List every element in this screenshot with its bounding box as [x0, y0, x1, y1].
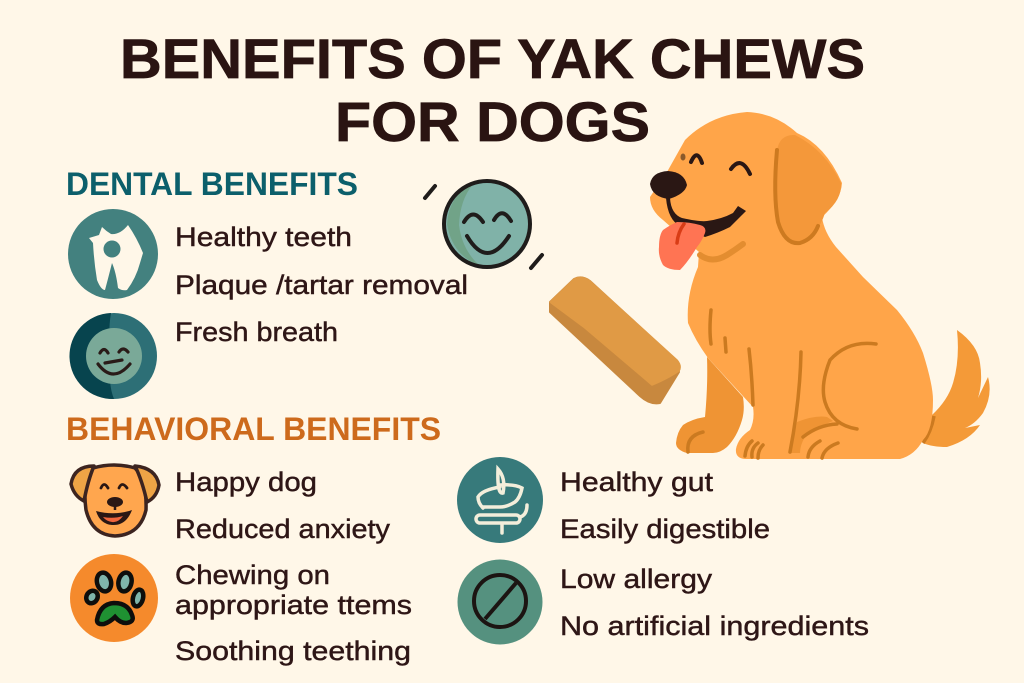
title: BENEFITS OF YAK CHEWS [120, 27, 865, 90]
dog collar fur [700, 244, 743, 260]
text: soothing teething: Soothing teething [175, 636, 411, 666]
icon: happy dog face [71, 465, 159, 536]
dog ear [776, 135, 841, 243]
text: chewing on appropriate items: Chewing on [175, 560, 330, 590]
dog back leg [676, 357, 744, 453]
dog nose [650, 171, 687, 199]
text: happy dog: Happy dog [175, 467, 317, 497]
icon: fresh breath smile [69, 313, 157, 399]
text: easily digestible: Easily digestible [560, 514, 770, 544]
dog body lines [688, 310, 876, 458]
text: plaque/tartar removal: Plaque /tartar removal [175, 270, 468, 300]
text: chewing on appropriate items [175, 560, 412, 620]
dog eyes [691, 155, 750, 174]
dog tail [923, 330, 990, 447]
text: no artificial ingredients: No artificial ingredients [560, 611, 869, 641]
heading: behavioral benefits: BEHAVIORAL BENEFITS [66, 411, 441, 447]
text: chewing on appropriate items: appropriate ttems [175, 590, 412, 620]
title [120, 27, 865, 153]
icon: tooth [68, 209, 158, 299]
dog leg shadow [790, 417, 833, 453]
icon: floating smiley with motion marks [425, 181, 542, 268]
title: FOR DOGS [335, 90, 650, 153]
dog illustration [650, 112, 990, 459]
text: low allergy: Low allergy [560, 564, 713, 594]
text: fresh breath: Fresh breath [175, 317, 338, 347]
icon: healthy gut [457, 457, 543, 543]
text: reduced anxiety: Reduced anxiety [175, 514, 391, 544]
dog mouth [666, 198, 746, 237]
dog body and head [650, 112, 933, 459]
heading: dental benefits: DENTAL BENEFITS [66, 166, 358, 202]
icon: no artificial ingredients [458, 560, 542, 644]
yak chew [550, 277, 680, 403]
text: healthy gut: Healthy gut [560, 467, 714, 497]
text: healthy teeth: Healthy teeth [175, 222, 352, 252]
dog tongue [659, 222, 705, 270]
icon: paw print [70, 554, 158, 642]
